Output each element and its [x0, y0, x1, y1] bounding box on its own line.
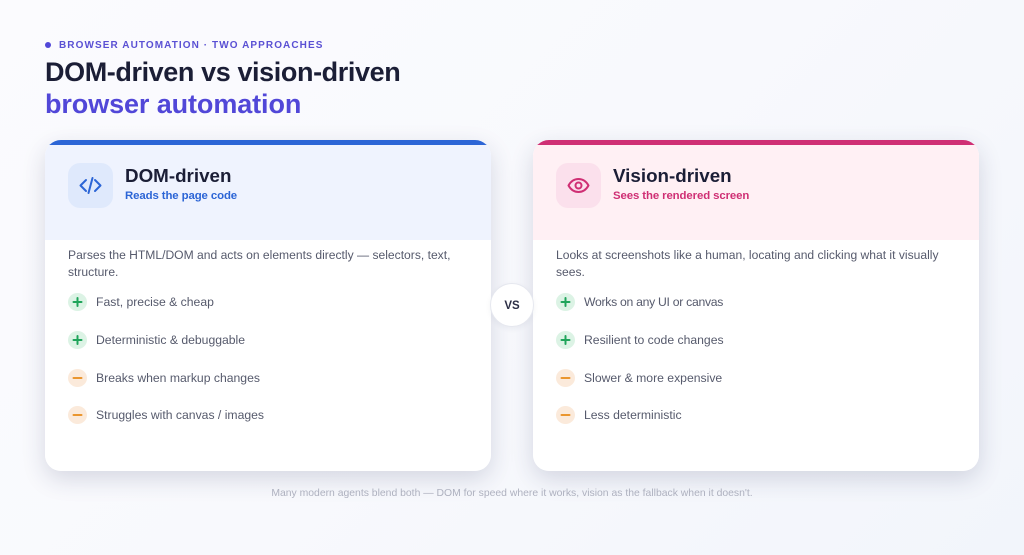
subheading: Sees the rendered screen — [613, 190, 749, 202]
heading: Vision-driven: Vision-driven — [613, 165, 732, 186]
VS badge — [490, 283, 534, 327]
pro item — [68, 293, 214, 311]
panel header: DOM-driven — [45, 145, 491, 240]
title — [45, 57, 400, 119]
subheading: Reads the page code — [125, 190, 237, 202]
con item — [556, 406, 682, 424]
icon: code — [68, 163, 113, 208]
description: Looks at screenshots like a human, locating and clicking what it visually sees. — [556, 248, 938, 279]
eyebrow: BROWSER AUTOMATION · TWO APPROACHES — [59, 40, 323, 51]
con item: Struggles with canvas / images — [96, 408, 264, 422]
con item — [68, 369, 260, 387]
pro item — [556, 293, 723, 311]
heading: DOM-driven: DOM-driven — [125, 165, 231, 186]
con item — [68, 406, 264, 424]
pro item: Resilient to code changes — [584, 333, 724, 347]
con item: Breaks when markup changes — [96, 371, 260, 385]
pro item — [556, 331, 724, 349]
title: DOM-driven vs vision-driven — [45, 57, 400, 87]
pro item — [68, 331, 245, 349]
con item: Less deterministic — [584, 408, 682, 422]
pro item: Fast, precise & cheap — [96, 295, 214, 309]
VS badge: VS — [504, 300, 520, 312]
title: browser automation — [45, 89, 301, 119]
icon: eye — [556, 163, 601, 208]
description: Parses the HTML/DOM and acts on elements directly — selectors, text, structure. — [68, 248, 450, 279]
panel: DOM-driven — [45, 140, 491, 471]
con item — [556, 369, 722, 387]
pro item: Deterministic & debuggable — [96, 333, 245, 347]
panel: Vision-driven — [533, 140, 979, 471]
footnote: Many modern agents blend both — DOM for speed where it works, vision as the fallback when it doesn't. — [271, 488, 753, 499]
pro item: Works on any UI or canvas — [584, 295, 723, 309]
con item: Slower & more expensive — [584, 371, 722, 385]
panel header: Vision-driven — [533, 145, 979, 240]
